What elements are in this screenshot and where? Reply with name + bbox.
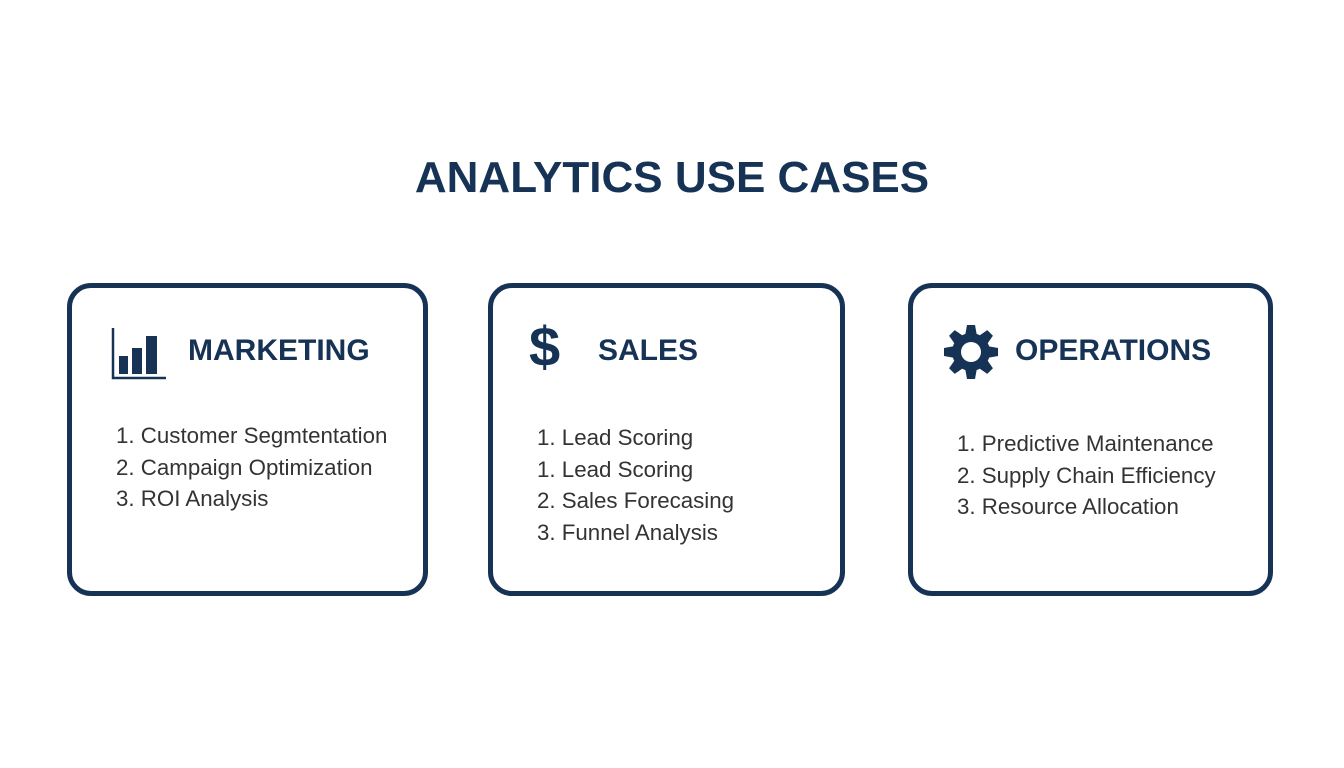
list: sales: 3. Funnel Analysis bbox=[537, 520, 718, 544]
list: sales bbox=[537, 425, 734, 544]
heading: operations: OPERATIONS bbox=[1015, 334, 1211, 367]
heading: sales: SALES bbox=[598, 334, 698, 367]
panel: marketing bbox=[67, 283, 428, 596]
list: sales: 1. Lead Scoring bbox=[537, 425, 693, 450]
title: ANALYTICS USE CASES bbox=[415, 153, 929, 202]
icon: bar chart bbox=[112, 328, 166, 380]
panel: sales bbox=[488, 283, 845, 596]
list: marketing bbox=[116, 423, 387, 511]
icon: dollar: $ bbox=[529, 315, 560, 378]
list: operations bbox=[957, 431, 1216, 519]
heading: marketing: MARKETING bbox=[188, 334, 370, 367]
list: operations: 3. Resource Allocation bbox=[957, 494, 1179, 519]
list: operations: 2. Supply Chain Efficiency bbox=[957, 462, 1216, 488]
list: marketing: 1. Customer Segmtentation bbox=[116, 423, 387, 448]
list: marketing: 3. ROI Analysis bbox=[116, 486, 268, 511]
list: marketing: 2. Campaign Optimization bbox=[116, 454, 373, 480]
list: sales: 1. Lead Scoring bbox=[537, 456, 693, 482]
list: sales: 2. Sales Forecasing bbox=[537, 488, 734, 513]
list: operations: 1. Predictive Maintenance bbox=[957, 431, 1214, 456]
panel: operations bbox=[908, 283, 1273, 596]
icon: gear bbox=[944, 325, 998, 379]
